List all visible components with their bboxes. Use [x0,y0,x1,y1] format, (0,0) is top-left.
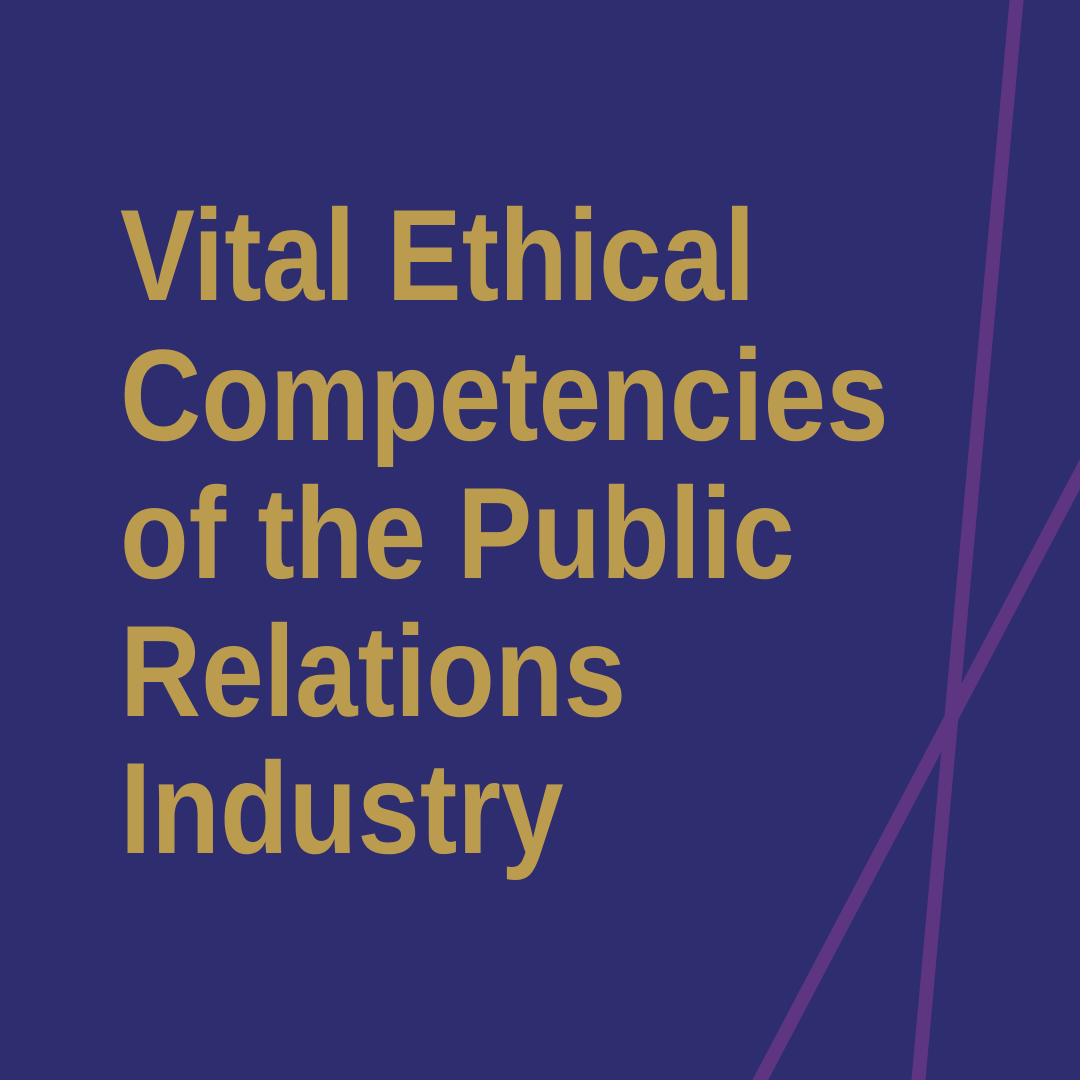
title: Relations [120,598,626,744]
title [120,182,889,881]
title: Competencies [120,322,889,468]
title: Vital Ethical [120,182,755,328]
title: of the Public [120,460,795,606]
title: Industry [120,735,564,881]
